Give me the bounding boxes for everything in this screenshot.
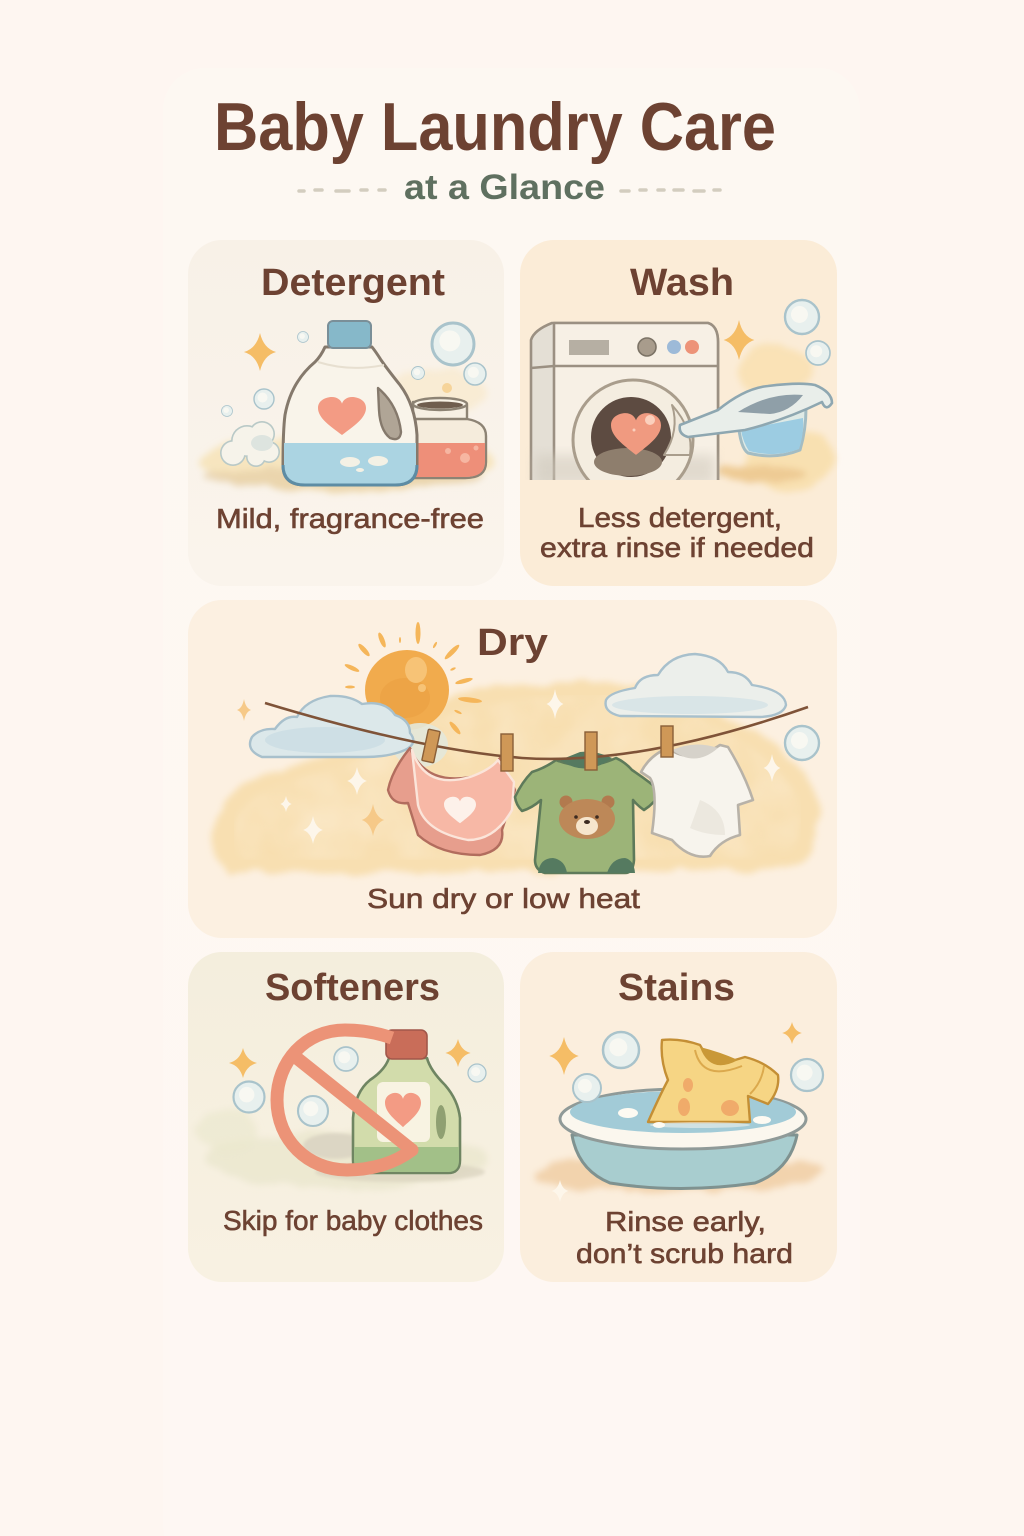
stains heading: Stains — [618, 967, 735, 1009]
wash heading: Wash — [630, 262, 734, 304]
ground shadow — [303, 1133, 485, 1182]
icon: suds — [220, 421, 280, 467]
wash caption: Less detergent, — [578, 502, 782, 533]
icon: sparkles — [237, 689, 780, 844]
wash caption: extra rinse if needed — [540, 532, 814, 563]
icon: pouring cup — [680, 384, 832, 456]
icon: clothes line — [265, 703, 808, 759]
icon: wash bubbles — [785, 300, 830, 365]
dry heading: Dry — [477, 622, 548, 664]
icon: prohibition sign — [277, 1030, 412, 1170]
ground wash — [199, 370, 495, 492]
subtitle dashed flourishes — [299, 190, 720, 191]
icon: detergent bottle — [283, 321, 417, 485]
icon: right cloud — [606, 654, 786, 717]
icon: heart in drum — [611, 413, 661, 455]
icon: sun — [344, 622, 482, 736]
icon: sparkles — [229, 1039, 471, 1078]
icon: detergent jar — [413, 398, 486, 478]
icon: water — [570, 1091, 796, 1133]
detergent caption: Mild, fragrance-free — [216, 503, 484, 534]
title: Baby Laundry Care — [214, 89, 776, 165]
panel: wash — [520, 240, 837, 586]
panel: dry — [188, 600, 837, 938]
dry caption: Sun dry or low heat — [367, 883, 640, 914]
softeners caption: Skip for baby clothes — [223, 1205, 483, 1236]
icon: softener bottle — [353, 1030, 460, 1173]
icon: pink bib — [388, 748, 515, 855]
icon: clothespins — [422, 726, 673, 771]
subtitle: at a Glance — [404, 168, 605, 207]
yellow watercolor backdrop — [215, 682, 821, 872]
detergent heading: Detergent — [261, 262, 445, 304]
icon: suds on water — [618, 1108, 771, 1128]
stains caption: don’t scrub hard — [576, 1238, 793, 1269]
icon: left cloud — [250, 696, 448, 767]
stains caption — [576, 1206, 793, 1269]
icon: bear face — [559, 796, 615, 839]
icon: washing machine — [531, 323, 718, 500]
panel: softeners — [188, 952, 504, 1282]
icon: heart label — [318, 397, 366, 435]
icon: sparkle — [244, 333, 276, 371]
wash caption — [540, 502, 814, 563]
softeners heading: Softeners — [265, 967, 440, 1009]
greenish wash — [195, 1106, 487, 1188]
stains caption: Rinse early, — [605, 1206, 766, 1237]
icon: yellow shirt — [648, 1040, 778, 1122]
icon: sparkles — [549, 1022, 802, 1202]
icon: bubbles — [234, 1047, 486, 1126]
icon: wash sparkle — [724, 320, 754, 360]
watercolor background — [714, 344, 834, 490]
icon: bubbles — [222, 323, 486, 416]
mottled highlight texture — [234, 695, 801, 860]
panel: stains — [520, 952, 837, 1282]
icon: softener heart — [385, 1093, 421, 1127]
icon: bib heart — [444, 797, 476, 823]
icon: white shirt — [641, 744, 753, 857]
icon: bubble — [785, 726, 819, 760]
ground wash — [533, 1154, 823, 1192]
icon: green onesie — [515, 752, 661, 873]
centre sheet — [163, 68, 860, 1536]
icon: basin — [560, 1089, 806, 1188]
icon: bubbles — [573, 1032, 823, 1102]
panel: detergent — [188, 240, 504, 586]
